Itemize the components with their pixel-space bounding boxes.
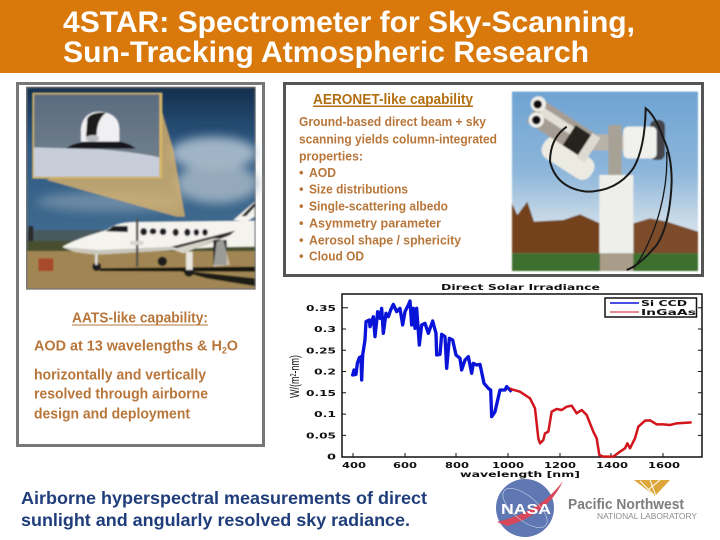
caption: Airborne hyperspectral measurements of direct <box>21 488 427 508</box>
legend: Si CCD <box>641 299 688 308</box>
photo: sun photometer <box>512 92 698 271</box>
x axis tick labels: 1400 <box>596 461 629 470</box>
curve: Si CCD <box>353 301 512 417</box>
list: retrieved properties: Aerosol shape / sphericity <box>309 232 462 248</box>
header banner <box>0 0 720 73</box>
y axis tick labels: 0.35 <box>306 304 337 313</box>
list: retrieved properties: • <box>299 248 304 264</box>
spectrum curves <box>353 301 692 457</box>
x axis tick labels: 800 <box>445 461 470 470</box>
list: retrieved properties: Asymmetry parameter <box>309 216 441 230</box>
title: 4STAR: Spectrometer for Sky-Scanning, <box>63 6 635 39</box>
list: retrieved properties: • <box>299 198 304 214</box>
y axis tick labels: 0.05 <box>306 432 337 440</box>
x axis tick labels: 1000 <box>492 461 525 470</box>
text: AATS heading: AATS-like capability: <box>72 310 208 326</box>
x axis tick labels: 400 <box>342 461 367 470</box>
panel: AATS-like capability <box>18 84 264 446</box>
x axis tick labels: 600 <box>393 461 418 470</box>
text: AERONET heading: AERONET-like capability <box>313 92 473 108</box>
chart: direct solar irradiance <box>287 283 702 479</box>
panel: AERONET-like capability <box>284 84 702 276</box>
x axis label: wavelength [nm] <box>460 470 580 479</box>
caption: sunlight and angularly resolved sky radiance. <box>21 510 410 530</box>
list: retrieved properties: • <box>299 232 304 248</box>
list: retrieved properties: AOD <box>309 165 336 180</box>
text: AOD at 13 wavelengths: 2 <box>222 346 227 356</box>
text: resolved through airborne design <box>34 368 208 422</box>
inset photo: dome <box>32 93 162 179</box>
legend: InGaAs <box>641 308 696 317</box>
list: retrieved properties: • <box>299 182 304 196</box>
list: retrieved properties: • <box>299 165 304 180</box>
text: AERONET description: properties: <box>299 148 363 164</box>
title <box>63 6 635 69</box>
curve: InGaAs <box>510 388 692 457</box>
list: retrieved properties: • <box>299 216 304 230</box>
x axis tick labels <box>342 461 681 470</box>
x axis tick labels: 1200 <box>544 461 577 470</box>
y axis label: -nm) <box>287 355 302 373</box>
text: resolved through airborne design: resolved through airborne <box>34 386 208 402</box>
y axis tick labels: 0 <box>327 452 337 462</box>
y axis tick labels <box>306 304 337 462</box>
logo: NASA: NASA <box>501 501 551 518</box>
chart title: Direct Solar Irradiance <box>441 283 601 292</box>
list: retrieved properties: Size distributions <box>309 182 408 196</box>
text: resolved through airborne design: design and deployment <box>34 406 190 422</box>
y axis tick labels: 0.3 <box>314 325 336 334</box>
plot axes <box>342 294 702 457</box>
title: Sun-Tracking Atmospheric Research <box>63 36 589 69</box>
legend <box>605 298 696 317</box>
list: retrieved properties <box>299 165 462 264</box>
text: AERONET description: scanning yields column-integrated <box>299 132 497 146</box>
y axis label: W/(m <box>287 367 302 398</box>
y axis tick labels: 0.15 <box>306 389 337 398</box>
list: retrieved properties: Single-scattering albedo <box>309 198 448 214</box>
list: retrieved properties: Cloud OD <box>309 248 364 264</box>
text: AOD at 13 wavelengths: AOD at 13 wavelengths & H <box>34 338 223 354</box>
y axis tick labels: 0.1 <box>314 410 337 419</box>
text: AOD at 13 wavelengths: O <box>227 338 238 354</box>
text: AERONET description: Ground-based direct beam + sky <box>299 114 487 129</box>
y axis label: 2 <box>289 373 298 377</box>
x axis tick labels: 1600 <box>648 461 681 470</box>
logo: Pacific Northwest National Laboratory: NATIONAL LABORATORY <box>597 512 698 521</box>
caption <box>21 488 427 530</box>
y axis tick labels: 0.25 <box>306 346 337 356</box>
text: resolved through airborne design: horizontally and vertically <box>34 368 206 384</box>
icon: PNNL mark <box>634 480 670 496</box>
y axis tick labels: 0.2 <box>314 368 336 376</box>
logo: Pacific Northwest National Laboratory <box>568 480 698 521</box>
text: AERONET description <box>299 114 497 264</box>
photo: aircraft with inset of 4STAR dome <box>26 87 258 290</box>
logo: Pacific Northwest National Laboratory: Pacific Northwest <box>568 497 684 513</box>
logo: NASA <box>496 479 563 537</box>
